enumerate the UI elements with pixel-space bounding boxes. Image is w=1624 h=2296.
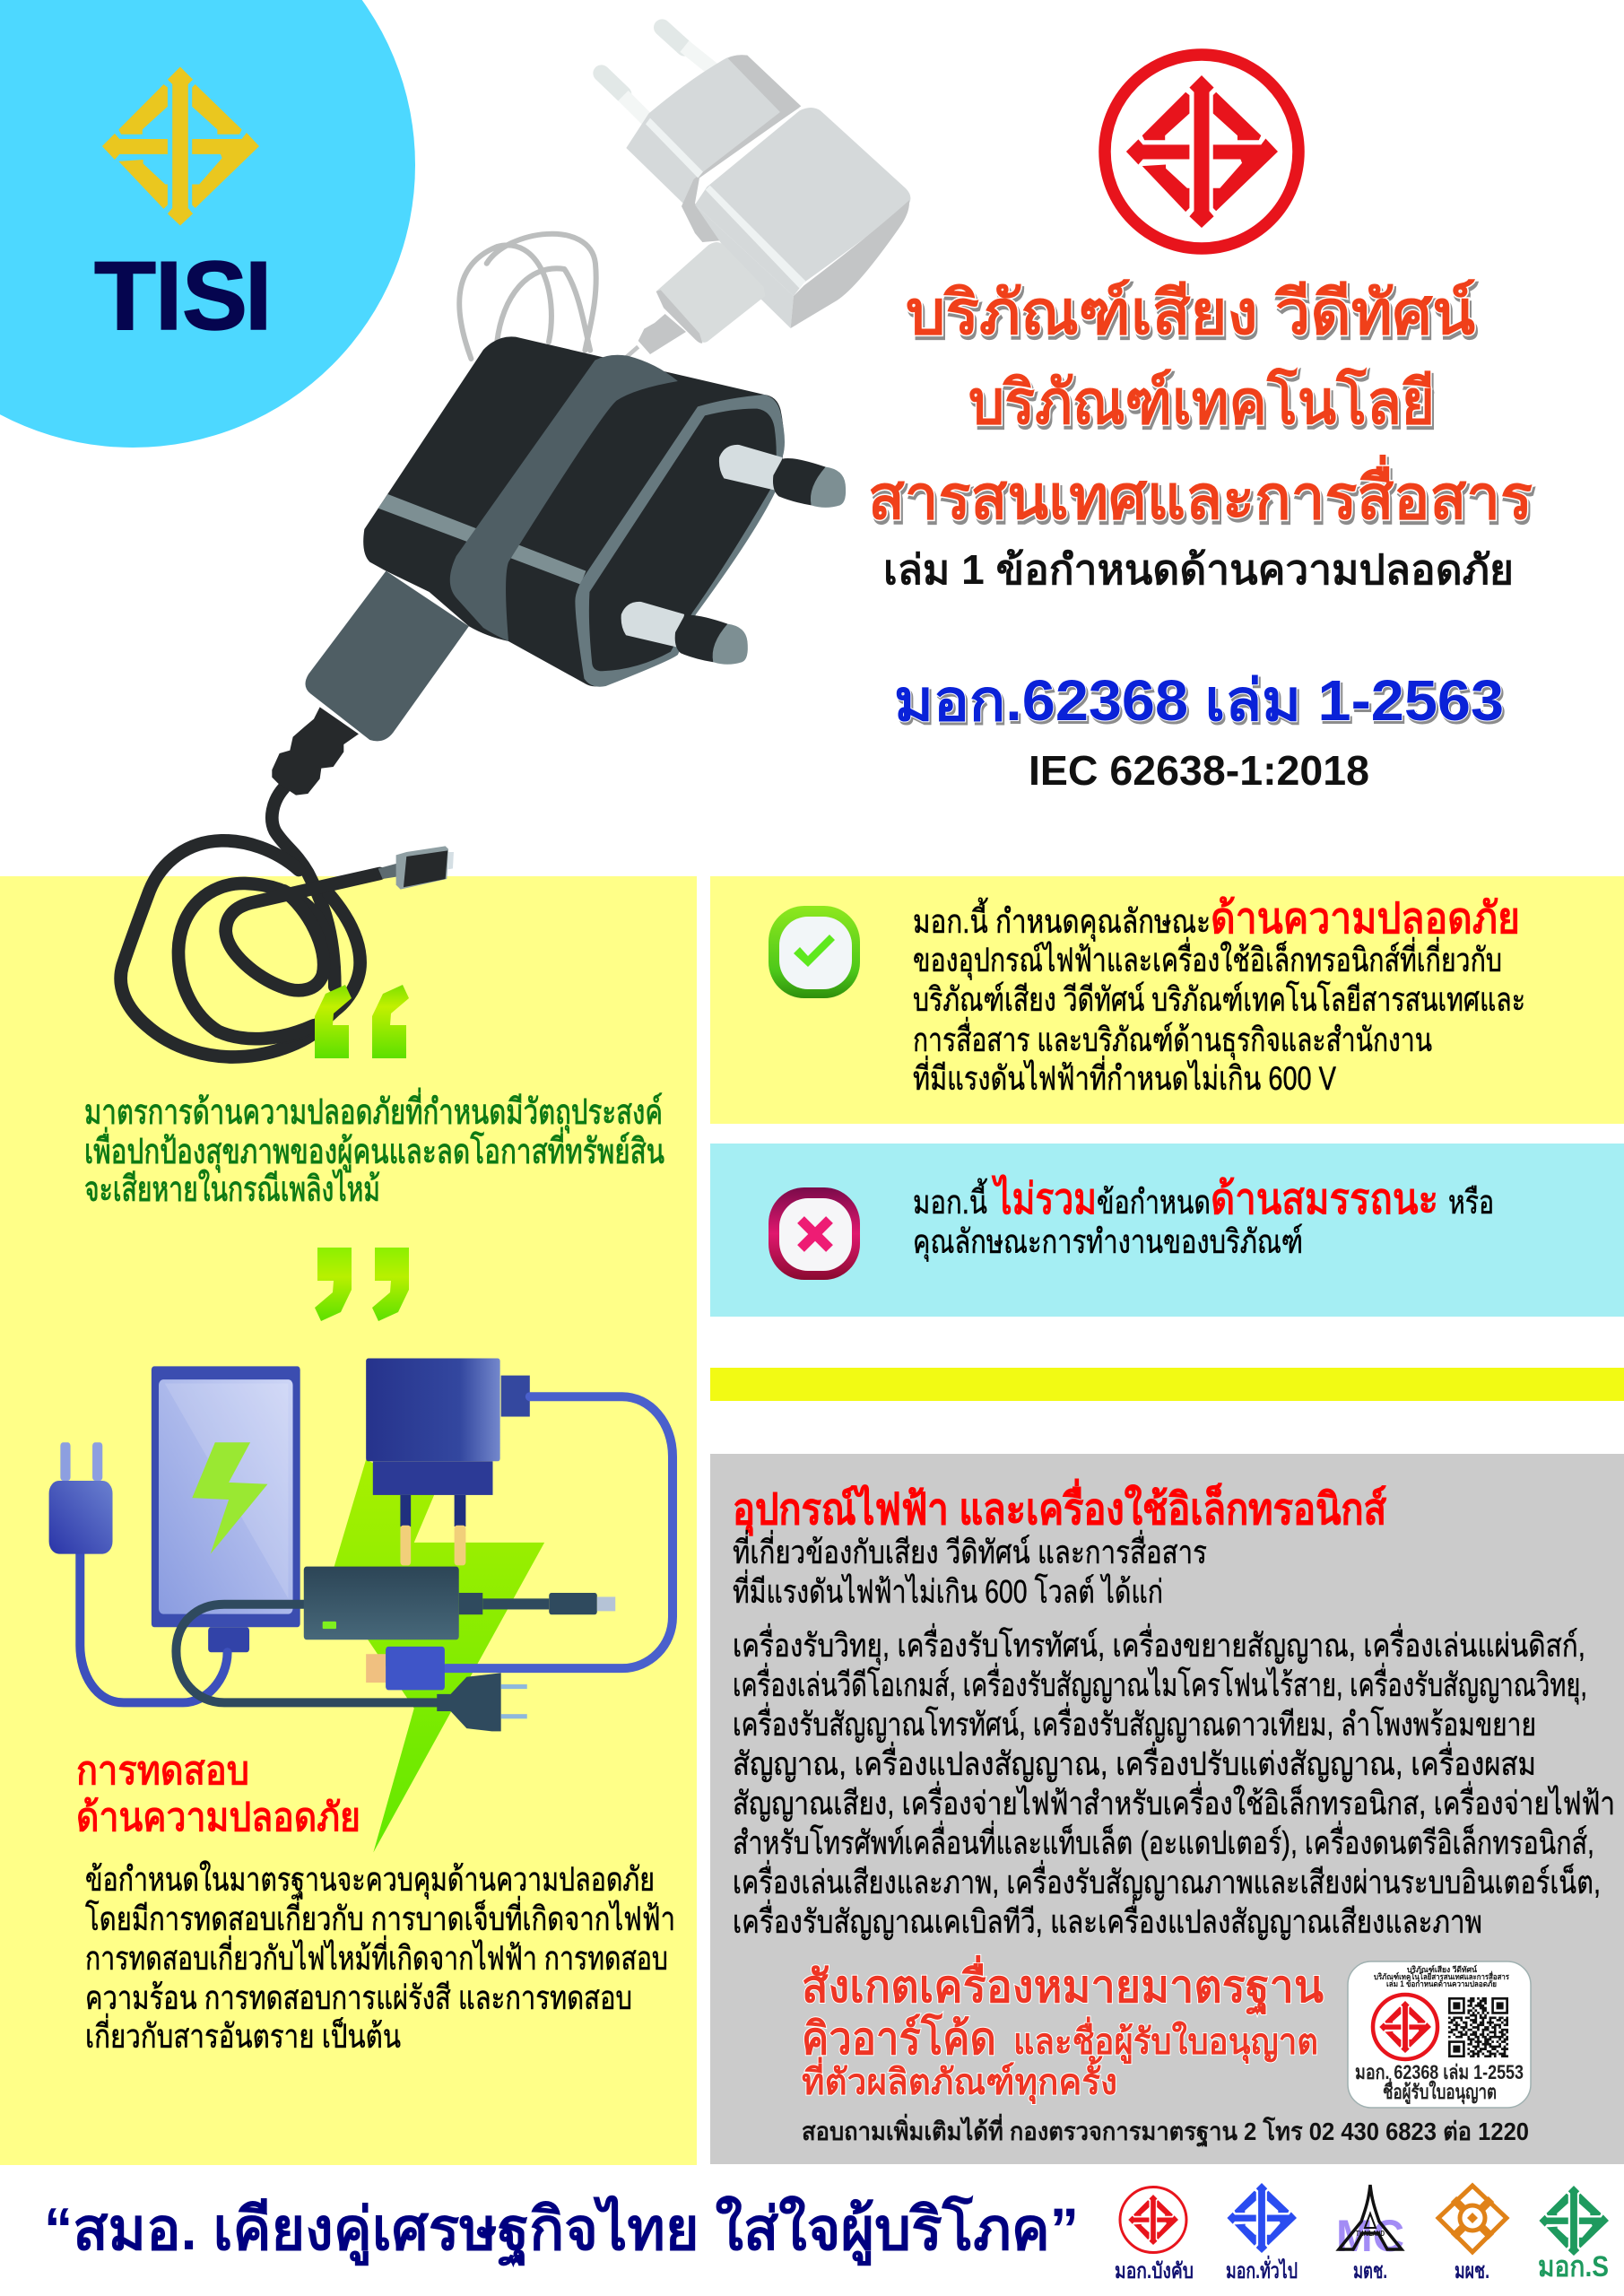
text: safety testing body: เกี่ยวกับสารอันตราย เป็นต้น bbox=[85, 2013, 401, 2055]
sample mark label card: ชื่อผู้รับใบอนุญาต bbox=[1383, 2077, 1497, 2105]
text: scope of standard bbox=[913, 895, 1525, 1097]
icon: cross button bbox=[769, 1187, 860, 1280]
text: exclusion of standard: มอก.นี้ bbox=[913, 1178, 988, 1221]
callout: look for the mark: สังเกตเครื่องหมายมาตรฐาน bbox=[802, 1955, 1324, 2015]
logo: general TIS: มอก.ทั่วไป bbox=[1226, 2255, 1298, 2283]
title: บริภัณฑ์เทคโนโลยี bbox=[968, 367, 1435, 437]
logo: mandatory TIS bbox=[1115, 2187, 1194, 2283]
text: scope of standard: มอก.นี้ กำหนดคุณลักษณะ bbox=[913, 897, 1211, 942]
text: product list bbox=[733, 1623, 1615, 1940]
TISI wordmark: S bbox=[182, 241, 248, 351]
text: product list: เครื่องรับสัญญาณเคเบิลทีวี, และเครื่องแปลงสัญญาณเสียงและภาพ bbox=[733, 1900, 1482, 1940]
text: exclusion of standard: ด้านสมรรถนะ bbox=[1211, 1176, 1438, 1223]
logo: community product mark: มผช. bbox=[1455, 2259, 1489, 2283]
logo: general TIS bbox=[1226, 2183, 1298, 2283]
text: safety testing body: โดยมีการทดสอบเกี่ยวกับ การบาดเจ็บที่เกิดจากไฟฟ้า bbox=[85, 1895, 675, 1937]
text: safety testing body: ข้อกำหนดในมาตรฐานจะควบคุมด้านความปลอดภัย bbox=[85, 1860, 655, 1900]
text: contact information: สอบถามเพิ่มเติมได้ที่ กองตรวจการมาตรฐาน 2 โทร 02 430 6823 ต่อ 1220 bbox=[802, 2113, 1529, 2148]
illustration: chargers and tablet with lightning bbox=[49, 1358, 673, 1853]
text: safety testing body bbox=[85, 1860, 675, 2055]
panel: scope yellow background bbox=[710, 876, 1624, 1124]
logo: community product mark bbox=[1438, 2186, 1507, 2283]
green quote text: จะเสียหายในกรณีเพลิงไหม้ bbox=[84, 1170, 380, 1209]
green quote text bbox=[84, 1088, 664, 1209]
heading: safety testing bbox=[76, 1749, 360, 1839]
sample mark label card: บริภัณฑ์เสียง วีดีทัศน์ bbox=[1407, 1964, 1478, 1974]
sample mark label card: มอก. 62368 เล่ม 1-2553 bbox=[1355, 2061, 1524, 2083]
heading: safety testing: ด้านความปลอดภัย bbox=[76, 1796, 360, 1839]
logo: national tower mark: มตช. bbox=[1353, 2259, 1387, 2283]
sample mark label card bbox=[1348, 1961, 1531, 2108]
text: scope of standard: การสื่อสาร และบริภัณฑ์ด้านธุรกิจและสำนักงาน bbox=[913, 1016, 1432, 1060]
subtitle: เล่ม 1 ข้อกำหนดด้านความปลอดภัย bbox=[883, 546, 1514, 593]
logo: TIS S mark: มอก.S bbox=[1538, 2250, 1609, 2283]
icon: grey charger with cable bbox=[459, 28, 910, 359]
green quote text: มาตรการด้านความปลอดภัยที่กำหนดมีวัตถุประสงค์ bbox=[84, 1088, 663, 1134]
text: exclusion of standard bbox=[913, 1173, 1494, 1262]
TISI wordmark: T bbox=[94, 241, 156, 351]
callout: look for the mark: และชื่อผู้รับใบอนุญาต bbox=[1013, 2016, 1318, 2065]
logo: TIS S mark bbox=[1538, 2186, 1609, 2283]
blue corner circle bbox=[0, 0, 415, 448]
callout: look for the mark: คิวอาร์โค้ด bbox=[802, 2012, 996, 2064]
icon: black charger bbox=[305, 336, 846, 741]
sample mark label card: เล่ม 1 ข้อกำหนดด้านความปลอดภัย bbox=[1386, 1979, 1497, 1988]
TISI wordmark: I bbox=[155, 241, 182, 351]
text: scope of standard: ที่มีแรงดันไฟฟ้าที่กำหนดไม่เกิน 600 V bbox=[913, 1055, 1336, 1097]
text: product intro: ที่มีแรงดันไฟฟ้าไม่เกิน 600 โวลต์ ได้แก่ bbox=[733, 1570, 1163, 1610]
footer slogan: “สมอ. เคียงคู่เศรษฐกิจไทย ใส่ใจผู้บริโภค” bbox=[44, 2194, 1079, 2267]
logo: national tower mark: THAILAND bbox=[1356, 2230, 1385, 2238]
TISI wordmark bbox=[94, 241, 272, 351]
logo: national tower mark bbox=[1336, 2185, 1404, 2283]
callout: look for the mark: ที่ตัวผลิตภัณฑ์ทุกครั้ง bbox=[802, 2056, 1117, 2105]
standard number: มอก.62368 เล่ม 1-2563 bbox=[894, 668, 1504, 733]
quotation mark: opening bbox=[315, 985, 409, 1058]
quotation mark: closing bbox=[315, 1248, 409, 1321]
emphasis: safety: ด้านความปลอดภัย bbox=[1211, 895, 1520, 943]
sample mark label card: บริภัณฑ์เทคโนโลยีสารสนเทศและการสื่อสาร bbox=[1374, 1970, 1509, 1981]
panel: grey product list background bbox=[710, 1454, 1624, 2164]
logo: mandatory TIS: มอก.บังคับ bbox=[1115, 2259, 1194, 2283]
TISI logo bbox=[94, 66, 272, 351]
title: สารสนเทศและการสื่อสาร bbox=[868, 454, 1533, 532]
text: product intro: ที่เกี่ยวข้องกับเสียง วีดิทัศน์ และการสื่อสาร bbox=[733, 1530, 1207, 1570]
icon: check button bbox=[769, 906, 860, 998]
icon: tangled black cable bbox=[121, 707, 454, 1057]
TISI wordmark: I bbox=[245, 241, 272, 351]
logo: national tower mark: MC bbox=[1336, 2211, 1404, 2261]
callout: look for the mark bbox=[802, 1955, 1324, 2105]
title bbox=[868, 279, 1533, 532]
text: exclusion of standard: หรือ bbox=[1448, 1184, 1494, 1221]
panel: exclusion cyan background bbox=[710, 1144, 1624, 1317]
icon: QR code bbox=[1448, 1997, 1508, 2057]
text: product intro bbox=[733, 1530, 1207, 1610]
text: exclusion of standard: ข้อกำหนด bbox=[1097, 1184, 1211, 1221]
logo: red TIS mandatory mark bbox=[1105, 55, 1298, 248]
text: safety testing body: การทดสอบเกี่ยวกับไฟไหม้ที่เกิดจากไฟฟ้า การทดสอบ bbox=[85, 1935, 668, 1977]
bright yellow divider bar bbox=[710, 1368, 1624, 1401]
heading: electrical and electronic equipment: อุปกรณ์ไฟฟ้า และเครื่องใช้อิเล็กทรอนิกส์ bbox=[733, 1478, 1387, 1536]
text: safety testing body: ความร้อน การทดสอบการแผ่รังสี และการทดสอบ bbox=[85, 1979, 632, 2016]
panel: left yellow bbox=[0, 876, 697, 2165]
green quote text: เพื่อปกป้องสุขภาพของผู้คนและลดโอกาสที่ทรัพย์สิน bbox=[84, 1127, 664, 1173]
IEC reference: IEC 62638-1:2018 bbox=[1029, 747, 1369, 794]
text: exclusion of standard: คุณลักษณะการทำงานของบริภัณฑ์ bbox=[913, 1223, 1303, 1262]
text: exclusion of standard: ไม่รวม bbox=[991, 1173, 1097, 1223]
title: บริภัณฑ์เสียง วีดีทัศน์ bbox=[906, 279, 1476, 347]
heading: safety testing: การทดสอบ bbox=[76, 1749, 249, 1793]
